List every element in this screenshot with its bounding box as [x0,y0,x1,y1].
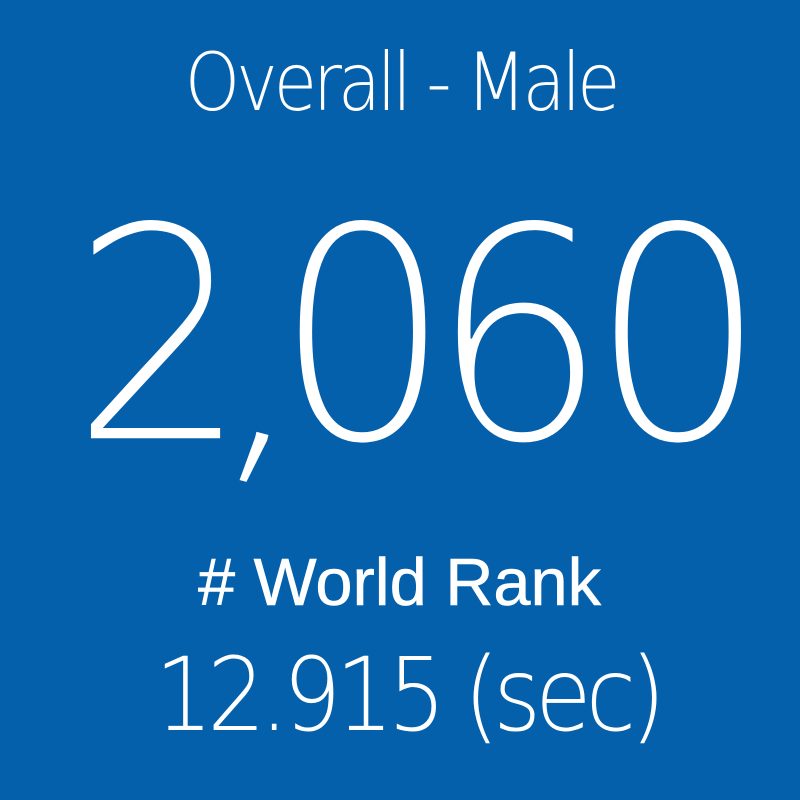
time value: 12.915 (sec) [155,635,666,754]
label: world rank: # World Rank [198,545,601,620]
big number: rank: 2,060 [71,165,768,530]
title: Overall - Male [185,36,620,129]
